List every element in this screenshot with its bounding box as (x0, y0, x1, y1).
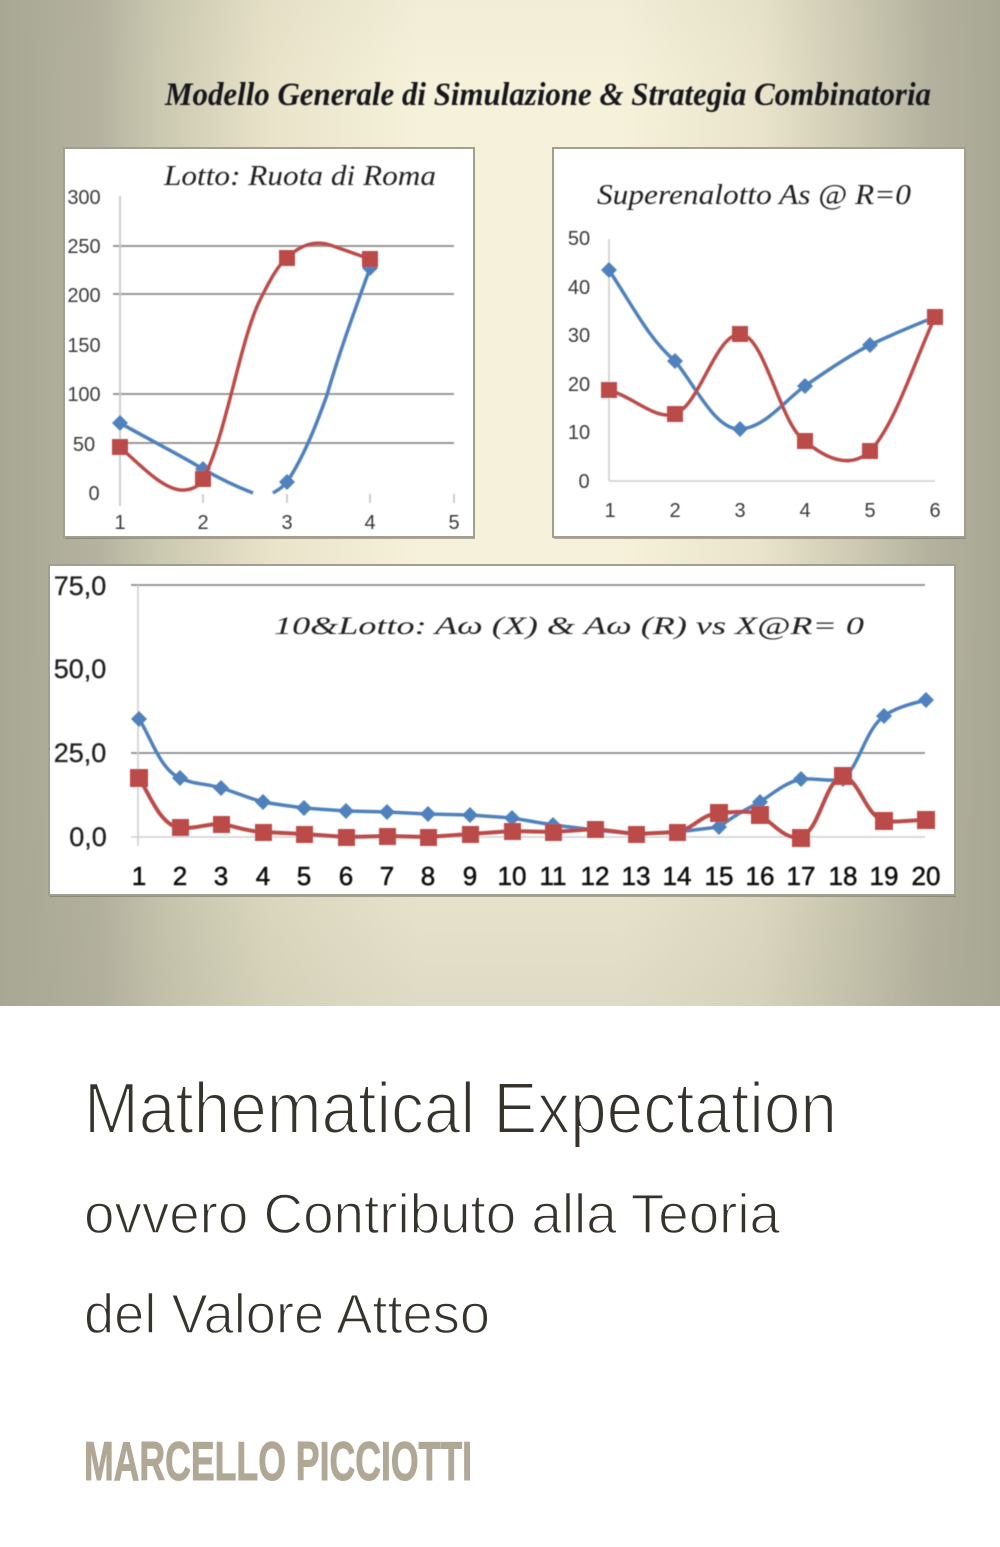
subtitle line 1: ovvero Contributo alla Teoria (84, 1182, 781, 1245)
axis labels: 2 (197, 512, 209, 534)
axis labels: 1 (114, 512, 126, 534)
title: Mathematical Expectation (84, 1069, 837, 1149)
x labels: 2 (173, 861, 187, 891)
axis labels: 0 (88, 483, 100, 505)
axis labels: 40 (568, 277, 590, 299)
red series (112, 243, 378, 490)
panel: Superenalotto chart (553, 148, 966, 539)
axis labels: 200 (67, 285, 101, 307)
x labels: 20 (912, 861, 940, 891)
axis labels (54, 571, 107, 852)
axis labels: 4 (364, 512, 376, 534)
x labels: 16 (746, 861, 774, 891)
axis labels: 75,0 (54, 571, 106, 601)
axis labels: 3 (734, 500, 746, 522)
x labels: 5 (297, 861, 311, 891)
cover background panel (0, 0, 1000, 1006)
axis labels: 1 (604, 500, 616, 522)
x labels: 11 (540, 861, 566, 891)
axis labels: 150 (67, 335, 101, 357)
x labels: 7 (380, 861, 394, 891)
x labels: 1 (132, 861, 146, 891)
x labels: 4 (256, 861, 270, 891)
chart title: Lotto: Lotto: Ruota di Roma (163, 160, 436, 192)
axis labels: 50 (568, 228, 590, 250)
red series (130, 767, 935, 847)
axis labels: 2 (669, 500, 681, 522)
red series (601, 309, 943, 461)
axis labels: 10 (568, 422, 590, 444)
x labels: 17 (787, 861, 815, 891)
blue series (112, 260, 378, 493)
chart title: 10eLotto: 10&Lotto: Aω (X) & Aω (R) vs X@R= 0 (274, 613, 865, 640)
x labels: 12 (581, 861, 609, 891)
blue series (131, 692, 934, 842)
x labels: 14 (663, 861, 691, 891)
axis labels: 250 (67, 236, 101, 258)
axis labels (67, 187, 460, 534)
cover heading: Modello Generale di Simulazione & Strategia Combinatoria (164, 77, 931, 113)
x labels: 18 (829, 861, 857, 891)
axis labels: 5 (864, 500, 876, 522)
x labels: 9 (463, 861, 477, 891)
axis labels: 0,0 (69, 822, 107, 852)
x labels: 10 (498, 861, 526, 891)
x labels: 3 (214, 861, 228, 891)
x labels: 6 (339, 861, 353, 891)
subtitle line 2: del Valore Atteso (84, 1282, 490, 1345)
chart title: Superenalotto: Superenalotto As @ R=0 (597, 180, 911, 211)
axis labels: 50,0 (54, 654, 106, 684)
panel: 10eLotto chart (49, 565, 956, 897)
axis labels: 5 (448, 512, 460, 534)
blue series (601, 262, 943, 437)
axis labels: 300 (67, 187, 101, 209)
axis labels: 25,0 (54, 738, 106, 768)
author: MARCELLO PICCIOTTI (84, 1430, 472, 1492)
axis labels: 4 (799, 500, 811, 522)
axis labels: 20 (568, 374, 590, 396)
x labels: 19 (870, 861, 898, 891)
axis labels: 6 (929, 500, 941, 522)
axis labels (568, 228, 941, 522)
x labels: 13 (622, 861, 650, 891)
x labels: 8 (421, 861, 435, 891)
x labels (132, 861, 940, 891)
axis labels: 30 (568, 325, 590, 347)
axis labels: 0 (578, 471, 590, 493)
axis labels: 50 (73, 434, 95, 456)
axis labels: 100 (67, 384, 101, 406)
panel: Lotto Ruota di Roma chart (64, 148, 475, 539)
x labels: 15 (705, 861, 733, 891)
axis labels: 3 (281, 512, 293, 534)
